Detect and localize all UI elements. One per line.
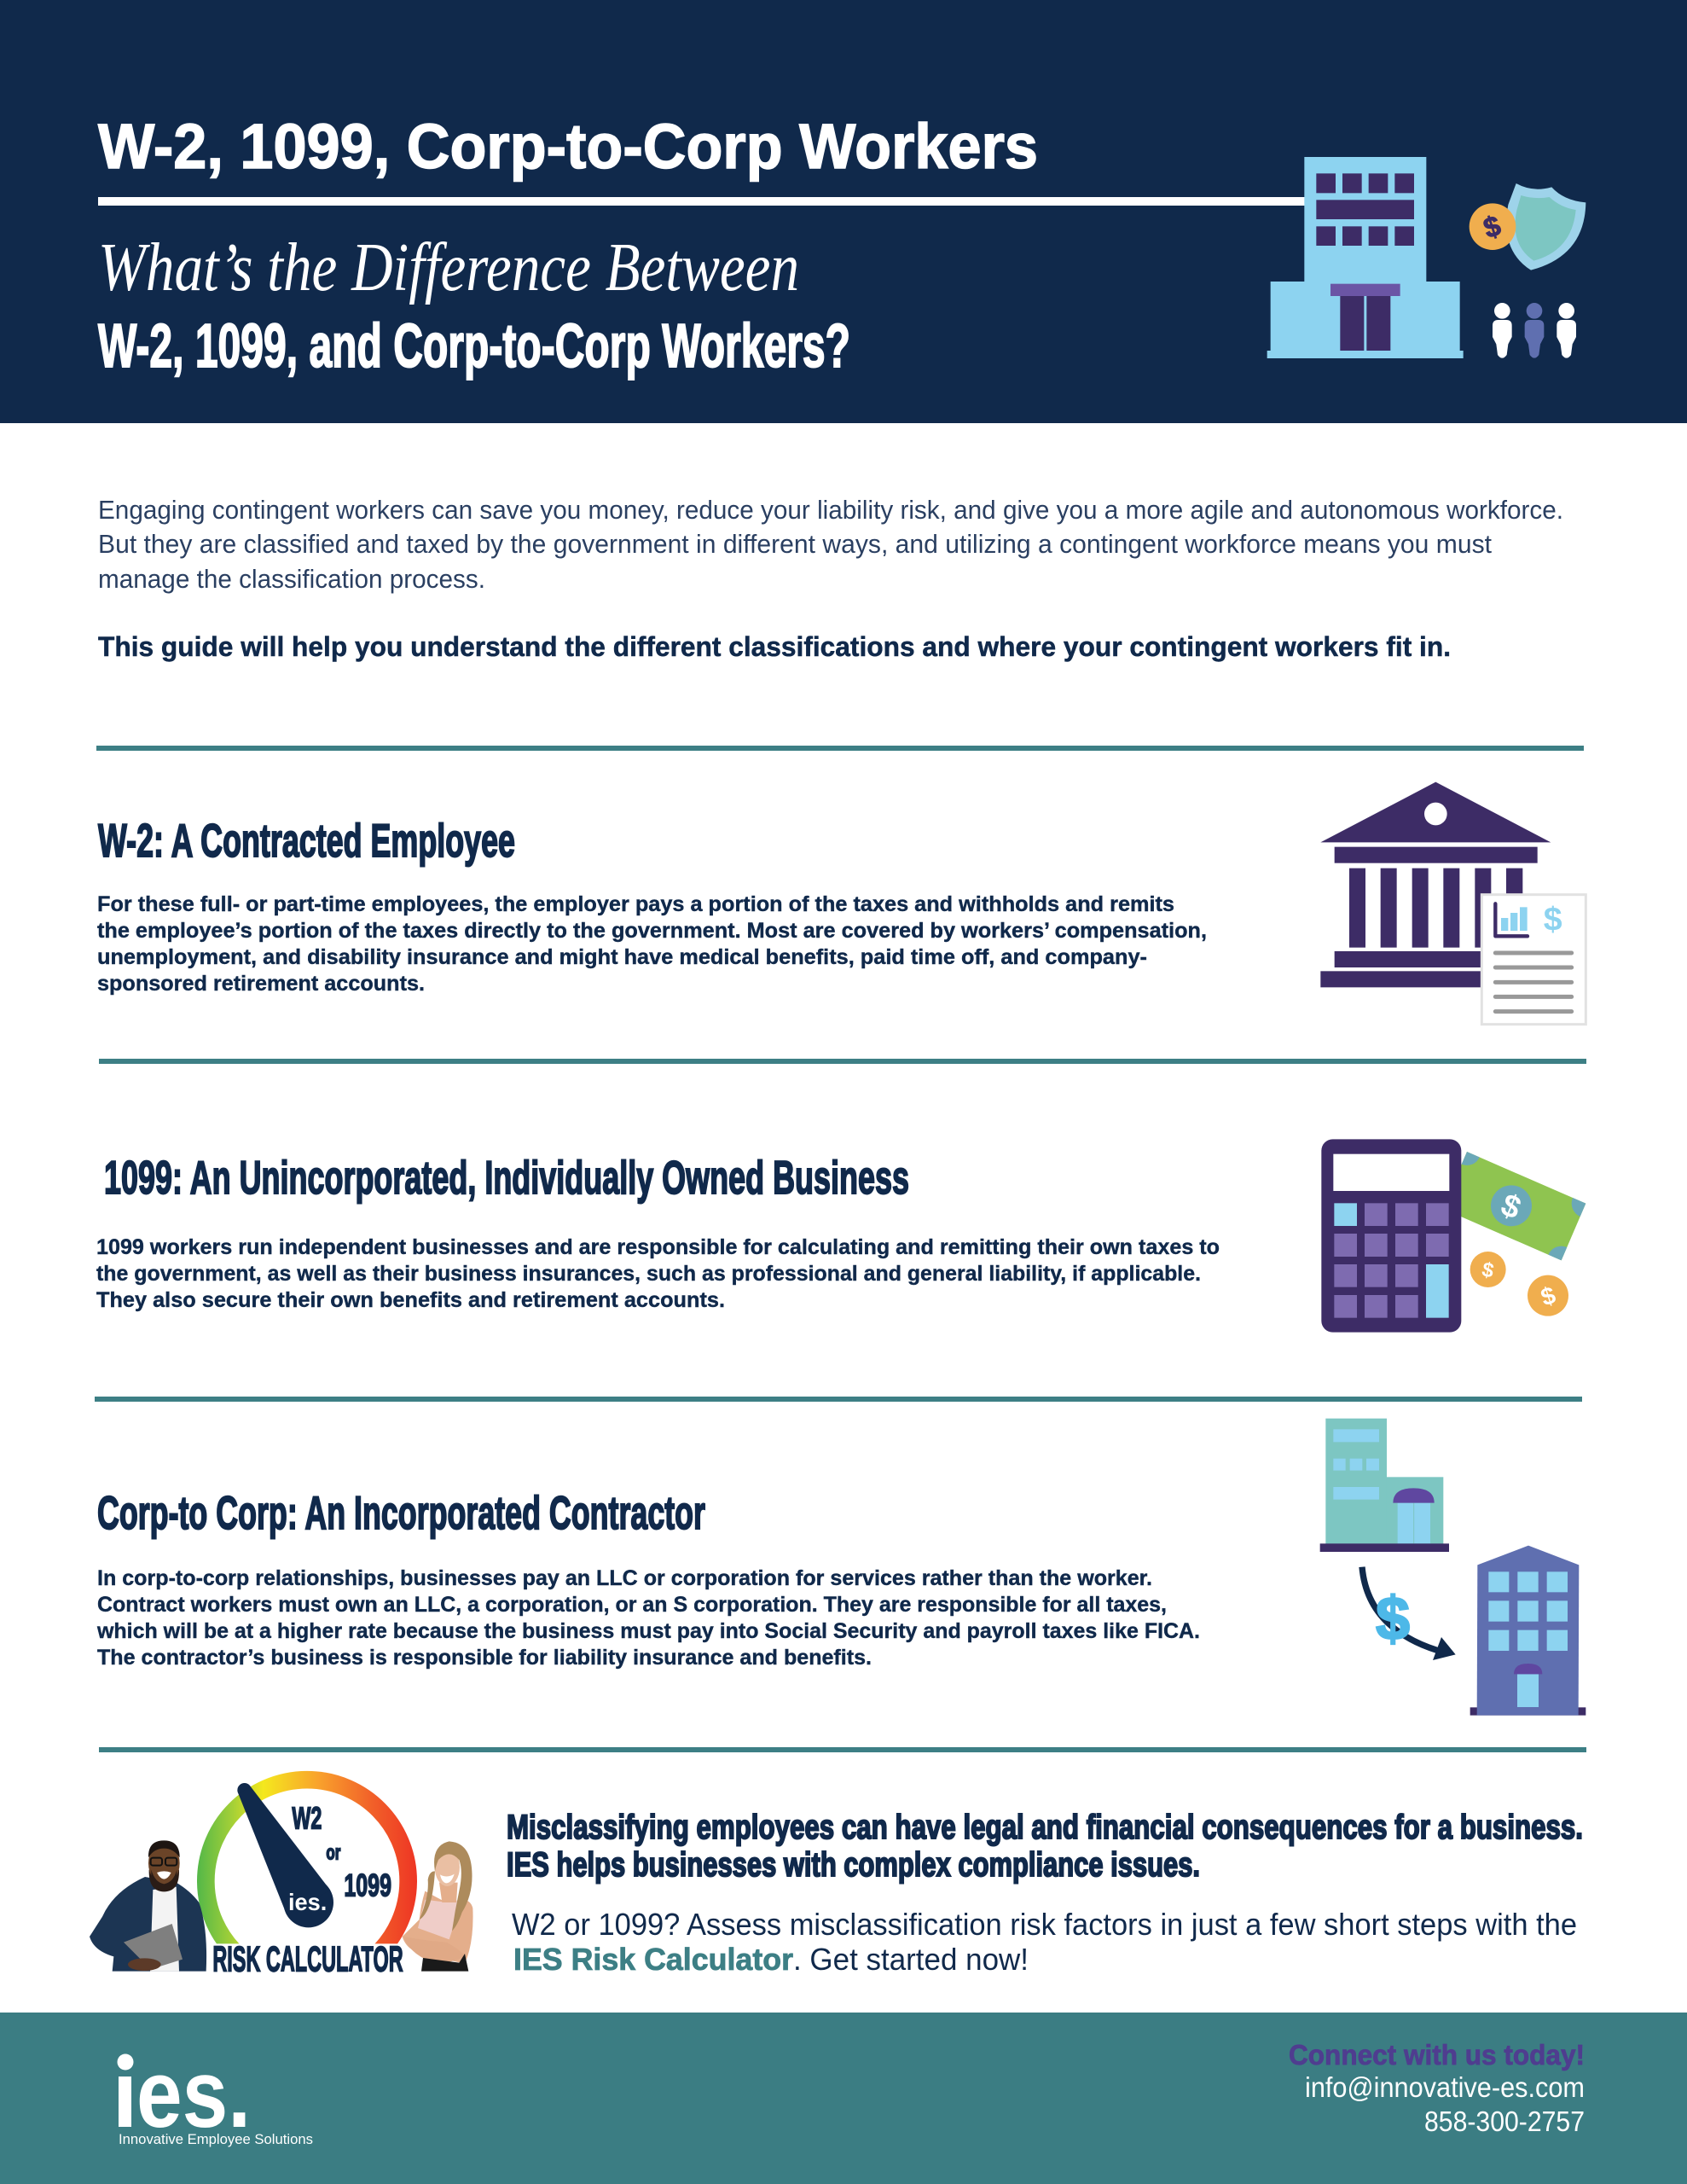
logo: ies [118, 2041, 313, 2147]
script subtitle: What’s the Difference Between [98, 230, 799, 305]
text block: W-2 description: For these full- or part-time employees, the employer pays a portion of the taxes and withholds and remits [97, 892, 1174, 916]
icon: office building, shield, coin and people [1267, 157, 1586, 358]
heading: Corp-to-Corp: Corp-to Corp: An Incorporated Contractor [97, 1486, 705, 1539]
heading: 1099: 1099: An Unincorporated, Individually Owned Business [104, 1151, 909, 1204]
text block: W-2 description: unemployment, and disability insurance and might have medical benefits, paid time off, and company- [97, 945, 1147, 969]
text block: risk calculator call to action: W2 or 1099? Assess misclassification risk factors in just a few short steps with the [512, 1907, 1577, 1942]
text block: Corp-to-Corp description: In corp-to-corp relationships, businesses pay an LLC or corporation for services rather than the worker. [97, 1566, 1152, 1590]
gauge labels [212, 1800, 403, 1979]
text block: 1099 description: 1099 workers run independent businesses and are responsible for calculating and remitting their own taxes to [96, 1235, 1220, 1259]
photo: man with laptop [90, 1840, 206, 1972]
text block: risk calculator call to action: IES Risk Calculator [513, 1942, 793, 1977]
intro bold statement: This guide will help you understand the different classifications and where your contingent workers fit in. [98, 631, 1451, 662]
panel: W-2 [97, 814, 1207, 996]
text block: Corp-to-Corp description: Contract workers must own an LLC, a corporation, or an S corporation. They are responsible for all taxes, [97, 1593, 1167, 1617]
risk calculator gauge graphic [90, 1780, 473, 1979]
icon: two buildings with payment arrow [1320, 1419, 1586, 1716]
text block: 1099 description: They also secure their own benefits and retirement accounts. [96, 1288, 725, 1312]
panel: Corp-to-Corp [96, 1486, 1200, 1670]
text block: W-2 description: the employee’s portion of the taxes directly to the government. Most are covered by workers’ compensation, [97, 919, 1207, 943]
title rule [98, 197, 1309, 206]
contact details: info@innovative-es.com [1305, 2071, 1585, 2103]
logo: ies: es. [136, 2041, 251, 2147]
text block: Corp-to-Corp description [96, 1566, 1200, 1670]
icon: bank with financial document: $ [1544, 901, 1562, 938]
gauge needle [237, 1783, 333, 1927]
icon: two buildings with payment arrow: $ [1376, 1585, 1410, 1653]
contact details: 858-300-2757 [1424, 2106, 1585, 2137]
footer band [0, 2013, 1687, 2184]
gauge labels: or [326, 1841, 340, 1864]
intro paragraph [98, 495, 1563, 594]
heading: W-2: W-2: A Contracted Employee [98, 814, 515, 867]
icon: calculator, banknote and coins: $ [1480, 1258, 1496, 1283]
text block: 1099 description [96, 1235, 1220, 1312]
icon: calculator, banknote and coins: $ [1496, 1186, 1527, 1226]
icon: calculator, banknote and coins: $ [1538, 1281, 1559, 1312]
text block: risk calculator call to action: . Get started now! [793, 1942, 1029, 1977]
icon: bank with financial document [1320, 782, 1586, 1025]
icon: office building, shield, coin and people: $ [1480, 210, 1505, 245]
intro paragraph: manage the classification process. [98, 564, 485, 594]
icon: calculator, banknote and coins [1321, 1138, 1600, 1333]
condensed subtitle: W-2, 1099, and Corp-to-Corp Workers? [98, 312, 850, 380]
contact details: Connect with us today! [1289, 2039, 1585, 2071]
header band [0, 0, 1687, 423]
text block: Corp-to-Corp description: which will be at a higher rate because the business must pay into Social Security and payroll taxes like FICA. [96, 1619, 1200, 1643]
contact details [1289, 2039, 1585, 2137]
text block: W-2 description [97, 892, 1207, 996]
intro paragraph: But they are classified and taxed by the government in different ways, and utilizing a contingent workforce means you must [98, 529, 1492, 559]
panel: 1099 [96, 1151, 1220, 1312]
text block: W-2 description: sponsored retirement accounts. [97, 972, 425, 996]
gauge labels: 1099 [344, 1868, 391, 1903]
photo: woman with crossed arms [403, 1841, 473, 1972]
gauge arc [206, 1780, 409, 1954]
callout: misclassification warning [507, 1809, 1583, 1884]
text block: 1099 description: the government, as well as their business insurances, such as professional and general liability, if applicable. [96, 1262, 1201, 1286]
text block: risk calculator call to action [512, 1907, 1577, 1977]
callout: misclassification warning: IES helps businesses with complex compliance issues. [507, 1846, 1200, 1884]
intro paragraph: Engaging contingent workers can save you money, reduce your liability risk, and give you a more agile and autonomous workforce. [98, 495, 1563, 525]
logo: ies: Innovative Employee Solutions [119, 2131, 313, 2147]
gauge labels: W2 [292, 1800, 322, 1835]
text block: Corp-to-Corp description: The contractor’s business is responsible for liability insurance and benefits. [97, 1646, 872, 1670]
gauge needle: ies. [288, 1889, 327, 1915]
gauge labels: RISK CALCULATOR [212, 1939, 403, 1979]
title: W-2, 1099, Corp-to-Corp Workers [98, 111, 1038, 182]
